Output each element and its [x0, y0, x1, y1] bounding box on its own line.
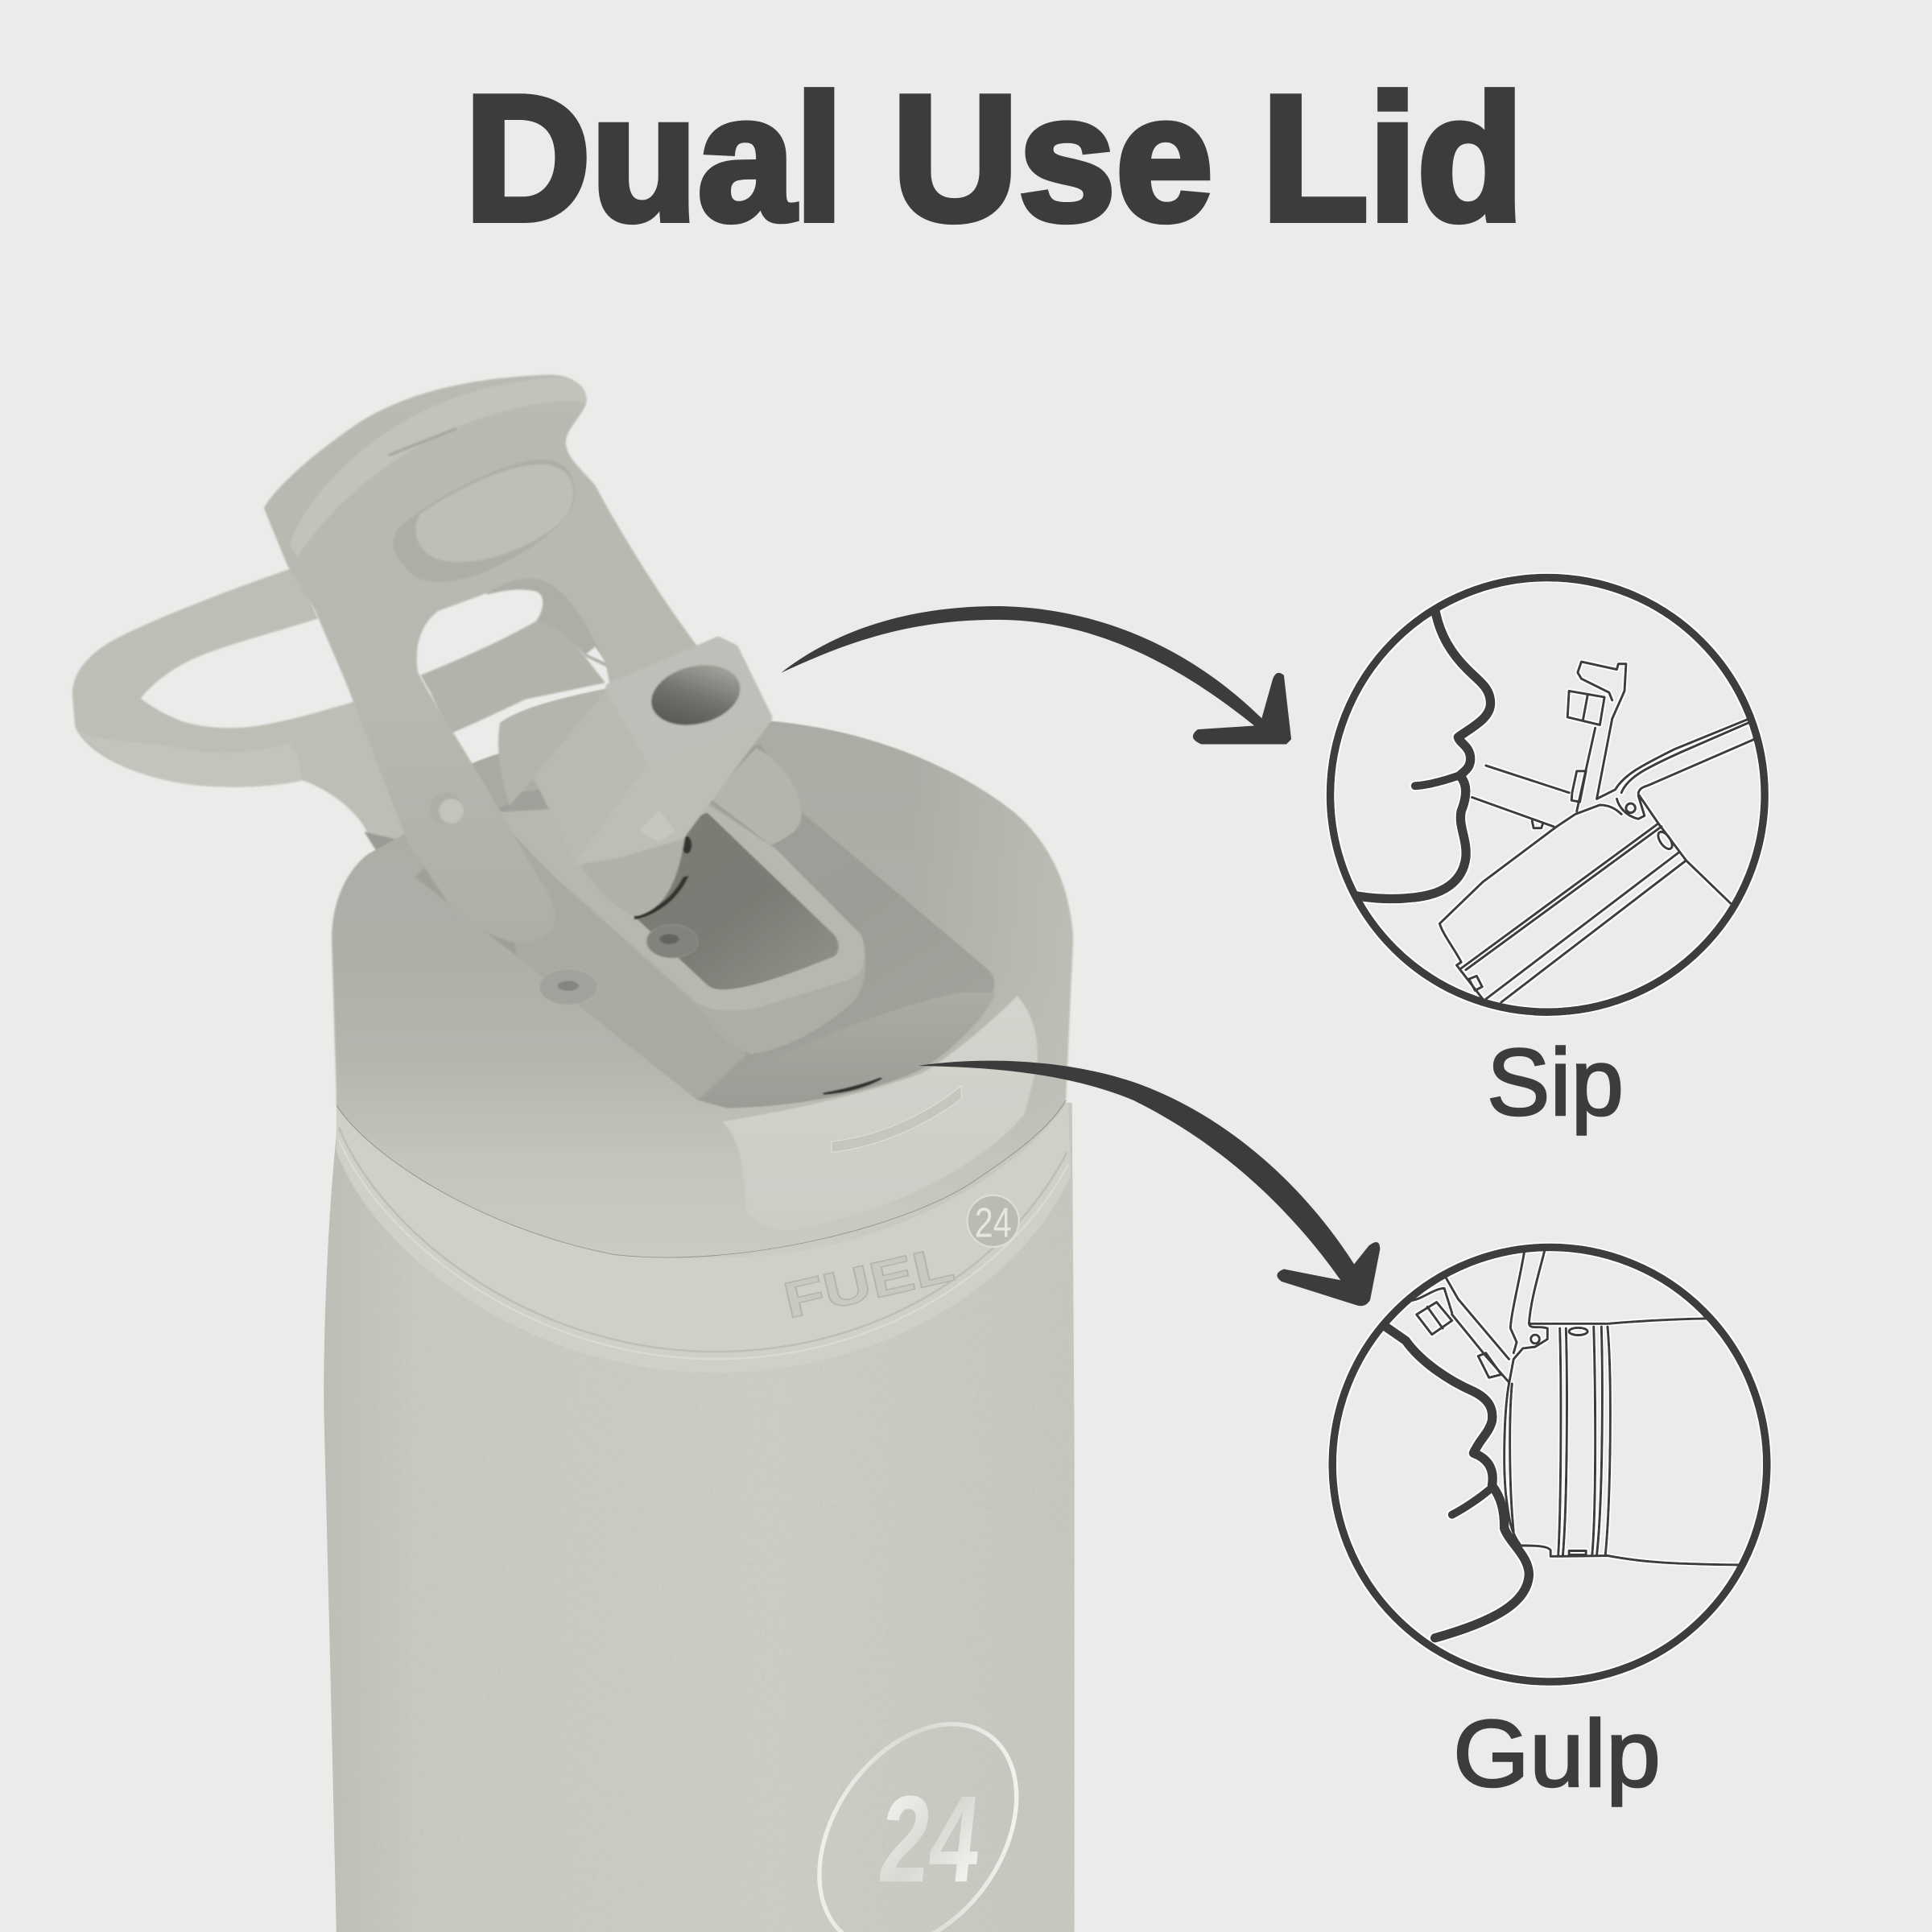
ledge: [488, 809, 746, 1100]
left rear block: [464, 753, 512, 811]
slot frame lip: [493, 802, 865, 1011]
gulp dark gap: [824, 1079, 881, 1094]
arm top lip highlight: [290, 378, 586, 557]
emboss badge 24: 24: [975, 1200, 1012, 1247]
arm slit line: [390, 429, 455, 455]
FUEL emboss wordmark: FUEL: [778, 1236, 960, 1329]
recessed cavity: [415, 745, 994, 1108]
ledge disc front: [539, 969, 597, 1005]
bottle body: [324, 1103, 1075, 1932]
left spout bump: [498, 687, 615, 806]
label gulp: Gulp: [1453, 1701, 1661, 1807]
spout peg: [638, 810, 675, 842]
lid seam line: [336, 1100, 1066, 1257]
spout top face: [610, 642, 767, 760]
drinking spout: [536, 642, 770, 862]
title: Dual Use Lid: [464, 59, 1524, 258]
right spout bump: [710, 748, 801, 845]
embossed logo on body: [778, 1687, 1057, 1932]
arrow to sip: [781, 606, 1291, 744]
carry loop and back structure: [72, 568, 618, 888]
lid: [332, 687, 1073, 1257]
back band of the arch: [420, 613, 605, 734]
slot well: [615, 812, 839, 989]
sip illustration: [1331, 578, 1765, 1012]
spout front face: [577, 720, 770, 862]
sip face profile: [1356, 609, 1491, 899]
bottle: [72, 375, 1087, 1932]
collar ring: [336, 1096, 1071, 1373]
spout stem: [578, 834, 691, 919]
sip bottle line art: [1439, 662, 1756, 1002]
push button base: [393, 460, 575, 582]
loop front face: [79, 732, 303, 787]
lid right edge light: [332, 721, 1073, 1257]
gulp slope lens: [698, 993, 995, 1108]
arrow to gulp: [918, 1061, 1380, 1306]
gap in arch: [586, 647, 607, 663]
carry loop handle: [72, 568, 444, 860]
hinge shadow: [364, 832, 423, 888]
gulp bottle line art: [1409, 1251, 1740, 1565]
push button pad: [416, 464, 573, 562]
flip arm: [264, 375, 698, 943]
well disc: [647, 925, 698, 958]
arm rivet: [430, 793, 464, 826]
label sip: Sip: [1487, 1030, 1624, 1136]
body texture: [322, 1111, 1087, 1932]
arch inner wall: [480, 570, 618, 672]
spout left face: [536, 688, 651, 862]
flip tab: [336, 996, 1066, 1257]
spout mouth hole: [645, 656, 746, 734]
flip arm and spout: [264, 375, 770, 943]
gulp face profile: [1385, 1327, 1529, 1638]
lid shell: [332, 721, 1073, 1257]
embossed logo on body: 24: [874, 1770, 987, 1908]
slot frame skirt: [493, 799, 865, 1054]
gulp illustration: [1332, 1247, 1767, 1682]
lid tab: [722, 996, 1038, 1230]
tab slit: [832, 1086, 962, 1152]
gulp circle: [1332, 1247, 1767, 1682]
sip circle: [1331, 578, 1765, 1012]
